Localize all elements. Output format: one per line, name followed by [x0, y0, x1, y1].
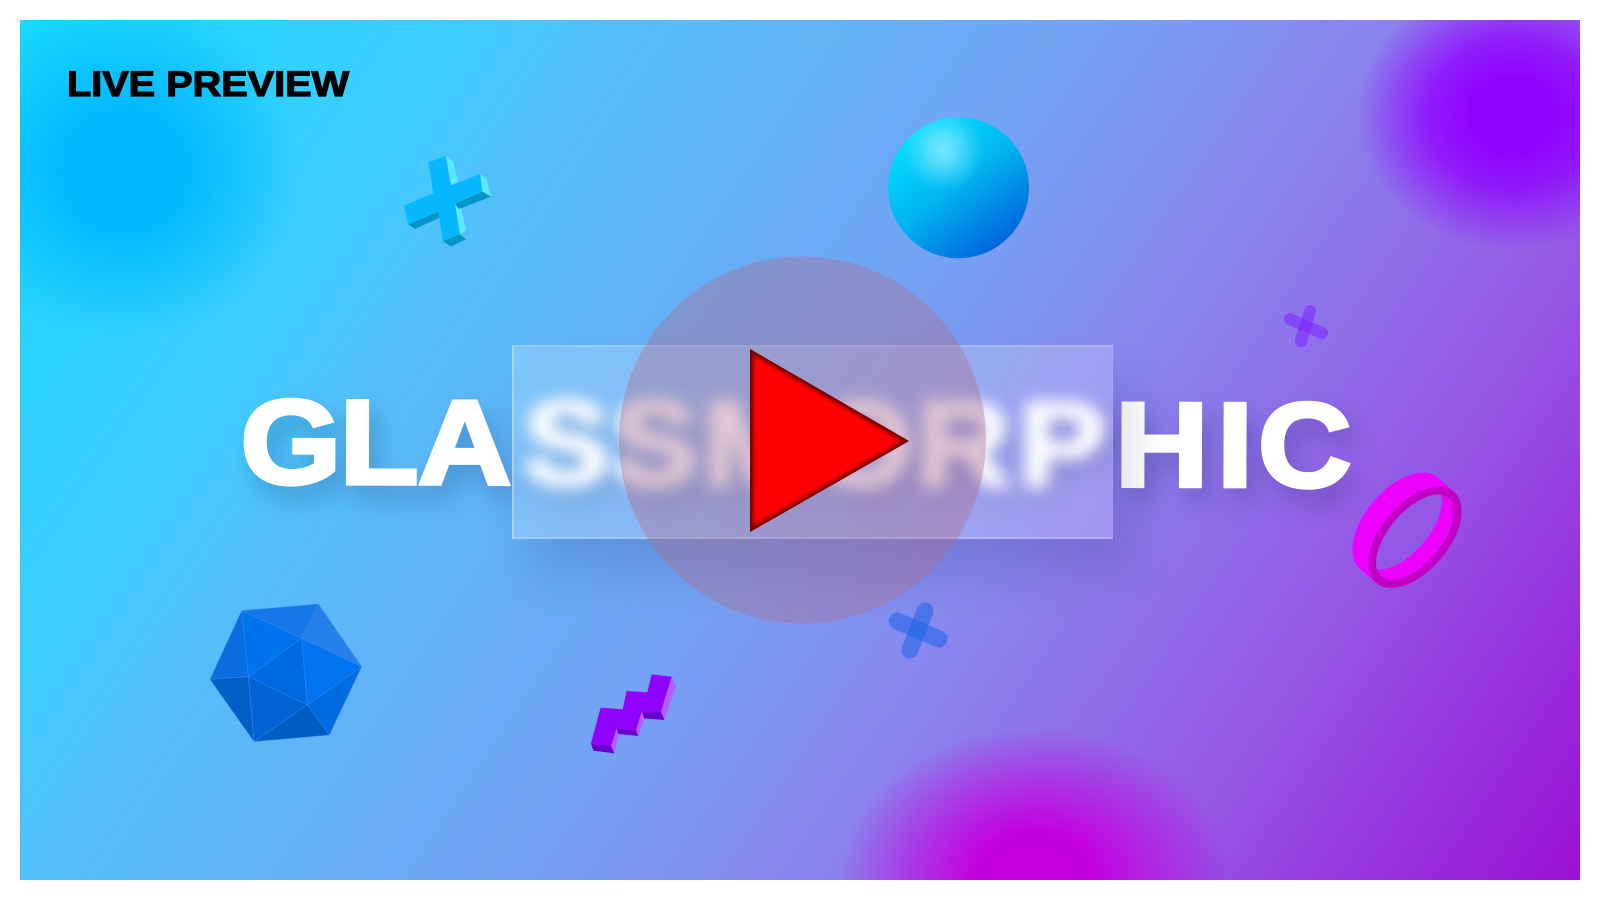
title: GLASSMORPHIC: GLASSMORPHIC [240, 376, 1352, 513]
text: LIVE PREVIEW: LIVE PREVIEW [67, 65, 349, 104]
icon: blue icosahedron [210, 604, 362, 742]
icon: purple 3D zigzag [591, 674, 676, 753]
play button circle [619, 256, 986, 624]
icon: red play triangle [750, 349, 909, 532]
icon: gradient sphere [888, 117, 1029, 258]
icon: translucent purple cross [1290, 311, 1322, 341]
overlay graphics [68, 70, 1462, 754]
icon: translucent blue cross [897, 611, 939, 650]
panel: frosted glass rectangle [512, 345, 1113, 539]
icon: 3D cyan plus [404, 156, 491, 247]
icon: magenta 3D ring [1352, 472, 1462, 588]
